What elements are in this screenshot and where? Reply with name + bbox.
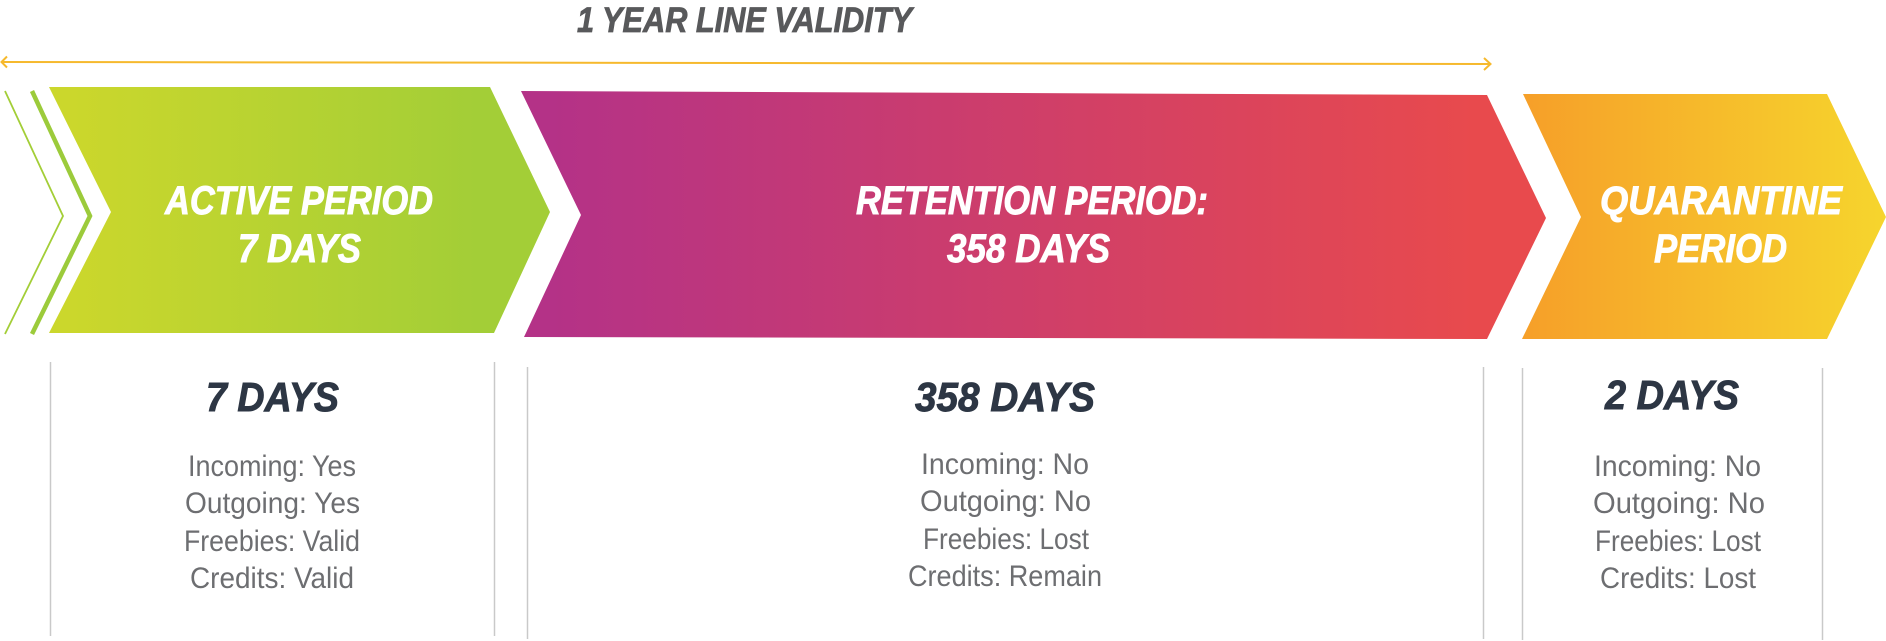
heading: active period: ACTIVE PERIOD [164, 179, 433, 223]
panel: quarantine period arrow [1522, 94, 1886, 339]
text block: quarantine permissions: Outgoing: No [1593, 487, 1765, 520]
text block: quarantine permissions [1593, 450, 1765, 595]
panel: active period arrow [49, 87, 550, 333]
panel: retention details [528, 367, 1484, 639]
text block: quarantine permissions: Freebies: Lost [1595, 525, 1762, 558]
text block: active permissions: Incoming: Yes [188, 450, 356, 483]
stat: 2 days: 2 DAYS [1604, 372, 1739, 418]
text block: active permissions [184, 450, 360, 595]
stat: 358 days: 358 DAYS [915, 374, 1095, 420]
heading: period: PERIOD [1654, 227, 1787, 271]
text block: retention permissions: Credits: Remain [908, 560, 1102, 593]
text block: retention permissions: Outgoing: No [920, 485, 1091, 518]
text block: quarantine permissions: Credits: Lost [1600, 562, 1757, 595]
text block: active permissions: Freebies: Valid [184, 525, 360, 558]
heading: active days: 7 DAYS [238, 227, 361, 271]
icon: thin chevron line [5, 91, 63, 334]
icon: thick chevron line [32, 91, 90, 334]
text block: active permissions: Outgoing: Yes [185, 487, 360, 520]
heading: retention days: 358 DAYS [947, 227, 1110, 271]
arrow: validity span [2, 56, 1490, 70]
panel: active details [50, 362, 494, 636]
text block: retention permissions: Freebies: Lost [923, 523, 1090, 556]
text block: retention permissions: Incoming: No [921, 448, 1089, 481]
heading: quarantine: QUARANTINE [1600, 179, 1843, 223]
stat: 7 days: 7 DAYS [206, 374, 339, 420]
panel: quarantine details [1522, 368, 1822, 640]
title: 1 year line validity: 1 YEAR LINE VALIDITY [577, 1, 914, 40]
text block: quarantine permissions: Incoming: No [1594, 450, 1761, 483]
text block: retention permissions [908, 448, 1102, 593]
text block: active permissions: Credits: Valid [190, 562, 354, 595]
panel: retention period arrow [521, 91, 1546, 339]
heading: retention period: RETENTION PERIOD: [856, 179, 1208, 223]
